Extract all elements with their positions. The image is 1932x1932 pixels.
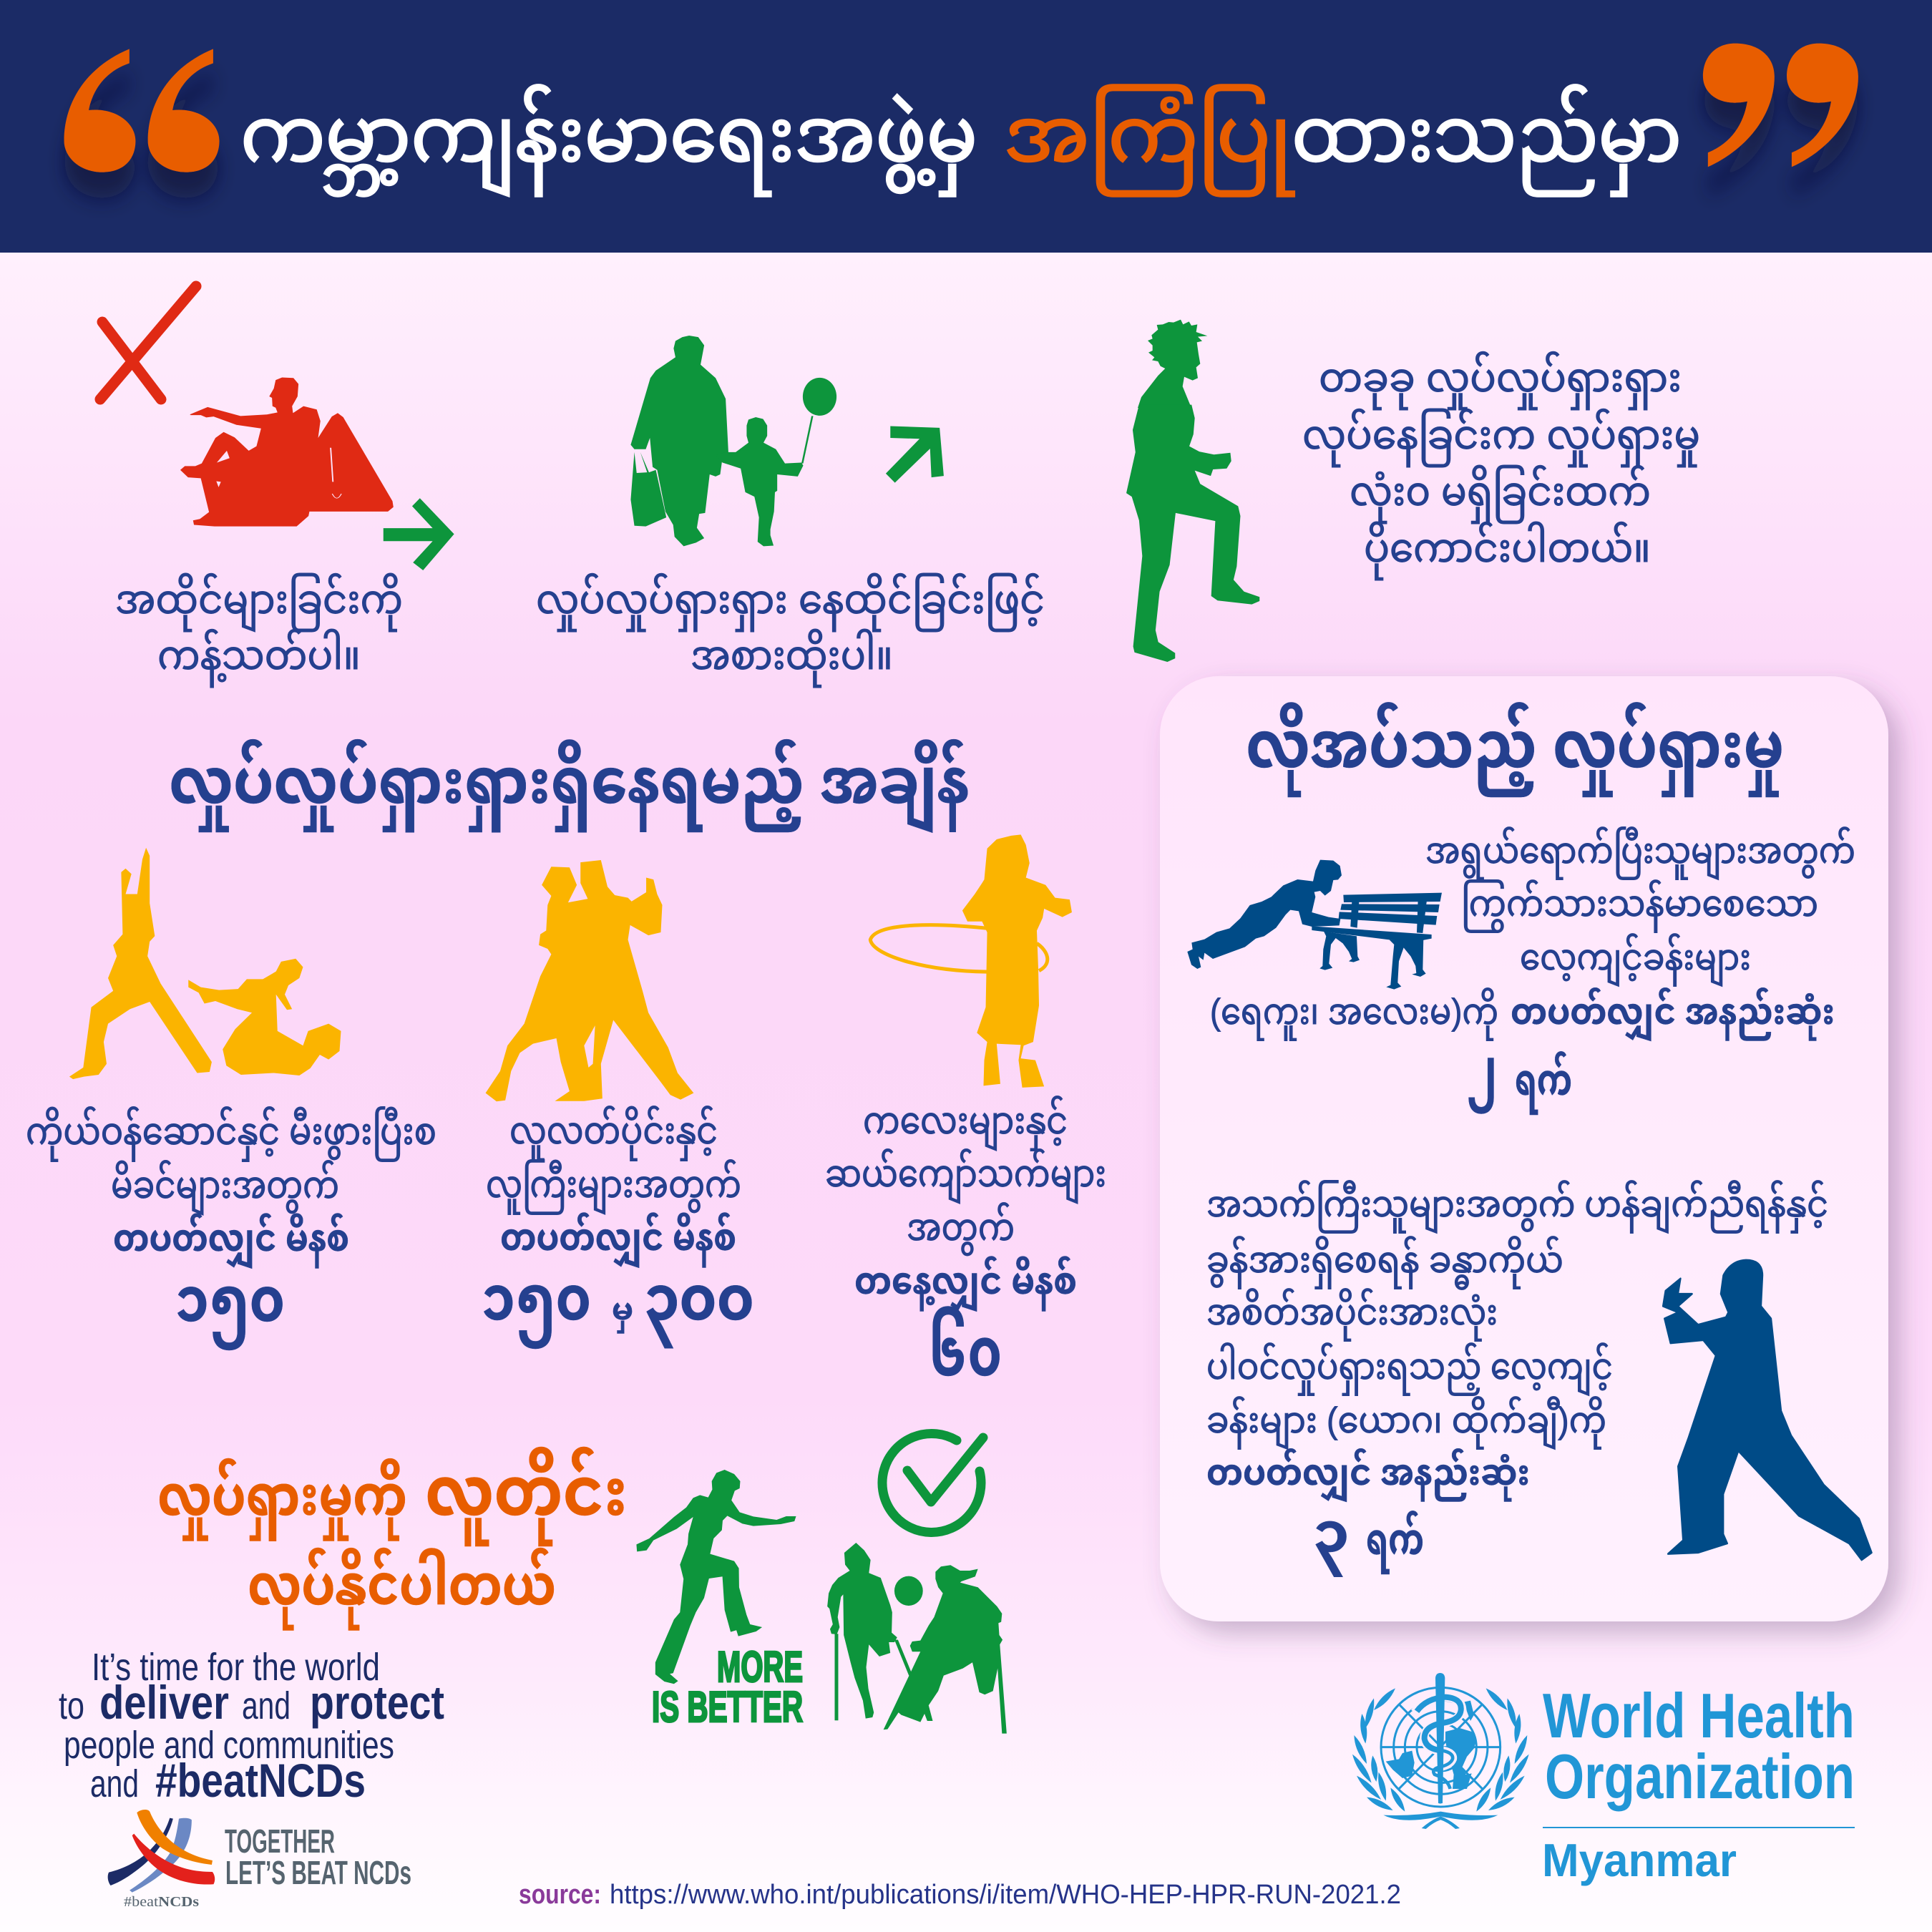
panel: required activity	[1160, 676, 1888, 1621]
heading: everyone can be active: လုပ်နိုင်ပါတယ်	[248, 1547, 556, 1631]
text: time for the world: protect	[310, 1676, 444, 1729]
logo: together let's beat NCDs: #beatNCDs	[124, 1894, 199, 1910]
column: pregnant women: ကိုယ်ဝန်ဆောင်နှင့် မီးဖွားပြီးစ	[26, 1106, 436, 1162]
text: older adults balance training: ပါဝင်လှုပ်ရှားရသည့် လေ့ကျင့်	[1206, 1343, 1613, 1395]
caption: stay active: လှုပ်လှုပ်ရှားရှား နေထိုင်ခြင်းဖြင့်	[536, 572, 1045, 633]
column: adults and older adults: လူလတ်ပိုင်းနှင့်	[509, 1105, 718, 1161]
icon: dancing couple	[486, 860, 693, 1101]
label: more is better: IS BETTER	[652, 1683, 803, 1731]
column: children and adolescents: ဆယ်ကျော်သက်များ	[825, 1148, 1106, 1205]
logo: World Health Organization: Organization	[1545, 1741, 1855, 1812]
text: time for the world: It’s time for the world	[92, 1646, 380, 1689]
laurel left	[1352, 1688, 1405, 1812]
text: older adults balance training: ၃	[1313, 1503, 1349, 1576]
column: children and adolescents: တနေ့လျှင် မိနစ်	[854, 1256, 1077, 1312]
icon: running woman	[636, 1470, 796, 1684]
text: time for the world	[59, 1646, 444, 1807]
logo: World Health Organization: World Health	[1543, 1680, 1855, 1751]
title: ထားသည်မှာ	[1292, 84, 1682, 197]
heading: everyone can be active: လူတိုင်း	[425, 1448, 628, 1546]
icon: woman with child and balloon	[630, 336, 836, 546]
caption: avoid sitting: အထိုင်များခြင်းကို	[115, 572, 403, 633]
heading: active time: လှုပ်လှုပ်ရှားရှားရှိနေရမည့် အချိန်	[169, 739, 970, 834]
caption: stay active: အစားထိုးပါ။	[691, 628, 893, 688]
text: adults muscle training: ၂	[1467, 1039, 1497, 1113]
caption: stay active	[536, 572, 1045, 688]
column: adults and older adults: ၁၅၀	[482, 1264, 591, 1349]
arrow: up right	[886, 426, 944, 483]
text: adults muscle training: လေ့ကျင့်ခန်းများ	[1520, 934, 1751, 986]
icon: woman stretching and parent with baby	[69, 848, 341, 1079]
title: အကြံပြု	[1004, 84, 1295, 197]
column: adults and older adults	[482, 1105, 754, 1349]
text: older adults balance training: အသက်ကြီးသူများအတွက် ဟန်ချက်ညီရန်နှင့်	[1206, 1181, 1828, 1233]
column: children and adolescents: ၆၀	[929, 1307, 1002, 1390]
icon: bench push-up	[1187, 860, 1442, 990]
header banner	[0, 0, 1932, 253]
column: pregnant women	[26, 1106, 436, 1350]
logo: WHO emblem	[1352, 1673, 1529, 1829]
text: time for the world: #beatNCDs	[155, 1754, 366, 1807]
title: ကမ္ဘာ့ကျန်းမာရေးအဖွဲ့မှ	[240, 84, 977, 197]
column: adults and older adults: မှ	[612, 1292, 633, 1333]
column: pregnant women: တပတ်လျှင် မိနစ်	[113, 1213, 349, 1269]
text: older adults balance training: အစိတ်အပိုင်းအားလုံး	[1206, 1289, 1498, 1341]
column: children and adolescents: အတွက်	[907, 1201, 1015, 1257]
source line: source:	[519, 1880, 601, 1910]
text: adults muscle training: ရက်	[1515, 1052, 1572, 1115]
label: more is better	[652, 1643, 803, 1731]
arrow: right	[384, 498, 454, 570]
text: time for the world: to	[59, 1684, 84, 1727]
caption: avoid sitting	[115, 572, 403, 688]
column: children and adolescents	[825, 1095, 1106, 1390]
source line: https://www.who.int/publications/i/item/WHO-HEP-HPR-RUN-2021.2	[610, 1880, 1401, 1910]
logo: together let's beat NCDs: TOGETHER	[225, 1823, 335, 1860]
text: doing any activity is better than none: တခုခု လှုပ်လှုပ်ရှားရှား	[1319, 351, 1682, 411]
heading: everyone can be active	[157, 1448, 628, 1631]
icon: woman with hula hoop	[870, 834, 1072, 1088]
icon: tai chi figure	[1663, 1260, 1872, 1560]
icon: man stepping up	[1126, 320, 1259, 662]
text: time for the world: and	[90, 1762, 139, 1805]
column: children and adolescents: ကလေးများနှင့်	[863, 1095, 1068, 1152]
heading: everyone can be active: လှုပ်ရှားမှုကို	[157, 1458, 407, 1541]
icon: check mark in circle	[882, 1433, 983, 1532]
text: older adults balance training: ရက်	[1366, 1511, 1424, 1574]
column: adults and older adults: တပတ်လျှင် မိနစ်	[500, 1212, 736, 1269]
text: time for the world: and	[242, 1684, 291, 1727]
ribbon	[1383, 1812, 1498, 1829]
text: time for the world: people and communities	[64, 1724, 394, 1767]
icon: sitting person on triangle	[180, 377, 394, 527]
column: pregnant women: ၁၅၀	[175, 1266, 285, 1350]
icon: red cross	[100, 286, 196, 399]
icon: people on crutches with ball	[827, 1543, 1007, 1734]
column: adults and older adults: လူကြီးများအတွက်	[486, 1158, 741, 1216]
label: more is better: MORE	[717, 1643, 803, 1691]
text: doing any activity is better than none: လုံး၀ မရှိခြင်းထက်	[1350, 464, 1651, 525]
text: adults muscle training: (ရေကူး၊ အလေးမ)ကို	[1210, 988, 1498, 1040]
text: doing any activity is better than none: ပိုကောင်းပါတယ်။	[1364, 521, 1651, 581]
text: older adults balance training: ခန်းများ (ယောဂ၊ ထိုက်ချီ)ကို	[1206, 1397, 1606, 1449]
laurel right	[1476, 1688, 1529, 1812]
text: older adults balance training: ခွန်အားရှိစေရန် ခန္ဓာကိုယ်	[1206, 1236, 1563, 1289]
title	[240, 84, 1682, 197]
text: adults muscle training	[1210, 827, 1855, 1115]
text: adults muscle training: တပတ်လျှင် အနည်းဆုံး	[1511, 987, 1835, 1041]
text: older adults balance training	[1206, 1181, 1828, 1576]
text: time for the world: deliver	[99, 1676, 229, 1729]
text: adults muscle training: ကြွက်သားသန်မာစေသော	[1461, 880, 1818, 932]
text: doing any activity is better than none	[1302, 351, 1700, 581]
logo: together let's beat NCDs	[108, 1810, 411, 1910]
icon: opening quote mark	[64, 49, 220, 172]
panel heading: လိုအပ်သည့် လှုပ်ရှားမှု	[1246, 702, 1784, 797]
column: adults and older adults: ၃၀၀	[644, 1264, 754, 1349]
text: older adults balance training: တပတ်လျှင် အနည်းဆုံး	[1206, 1448, 1530, 1502]
logo mark	[108, 1810, 215, 1893]
column: pregnant women: မိခင်များအတွက်	[111, 1159, 339, 1216]
logo: World Health Organization: Myanmar	[1542, 1834, 1737, 1886]
caption: avoid sitting: ကန့်သတ်ပါ။	[157, 628, 361, 688]
text: doing any activity is better than none: လုပ်နေခြင်းက လှုပ်ရှားမှု	[1302, 408, 1700, 468]
text: adults muscle training: အရွယ်ရောက်ပြီးသူများအတွက်	[1425, 827, 1855, 879]
icon: closing quote mark	[1703, 44, 1858, 167]
logo: World Health Organization	[1542, 1680, 1855, 1886]
logo: together let's beat NCDs: LET’S BEAT NCDs	[225, 1854, 411, 1891]
